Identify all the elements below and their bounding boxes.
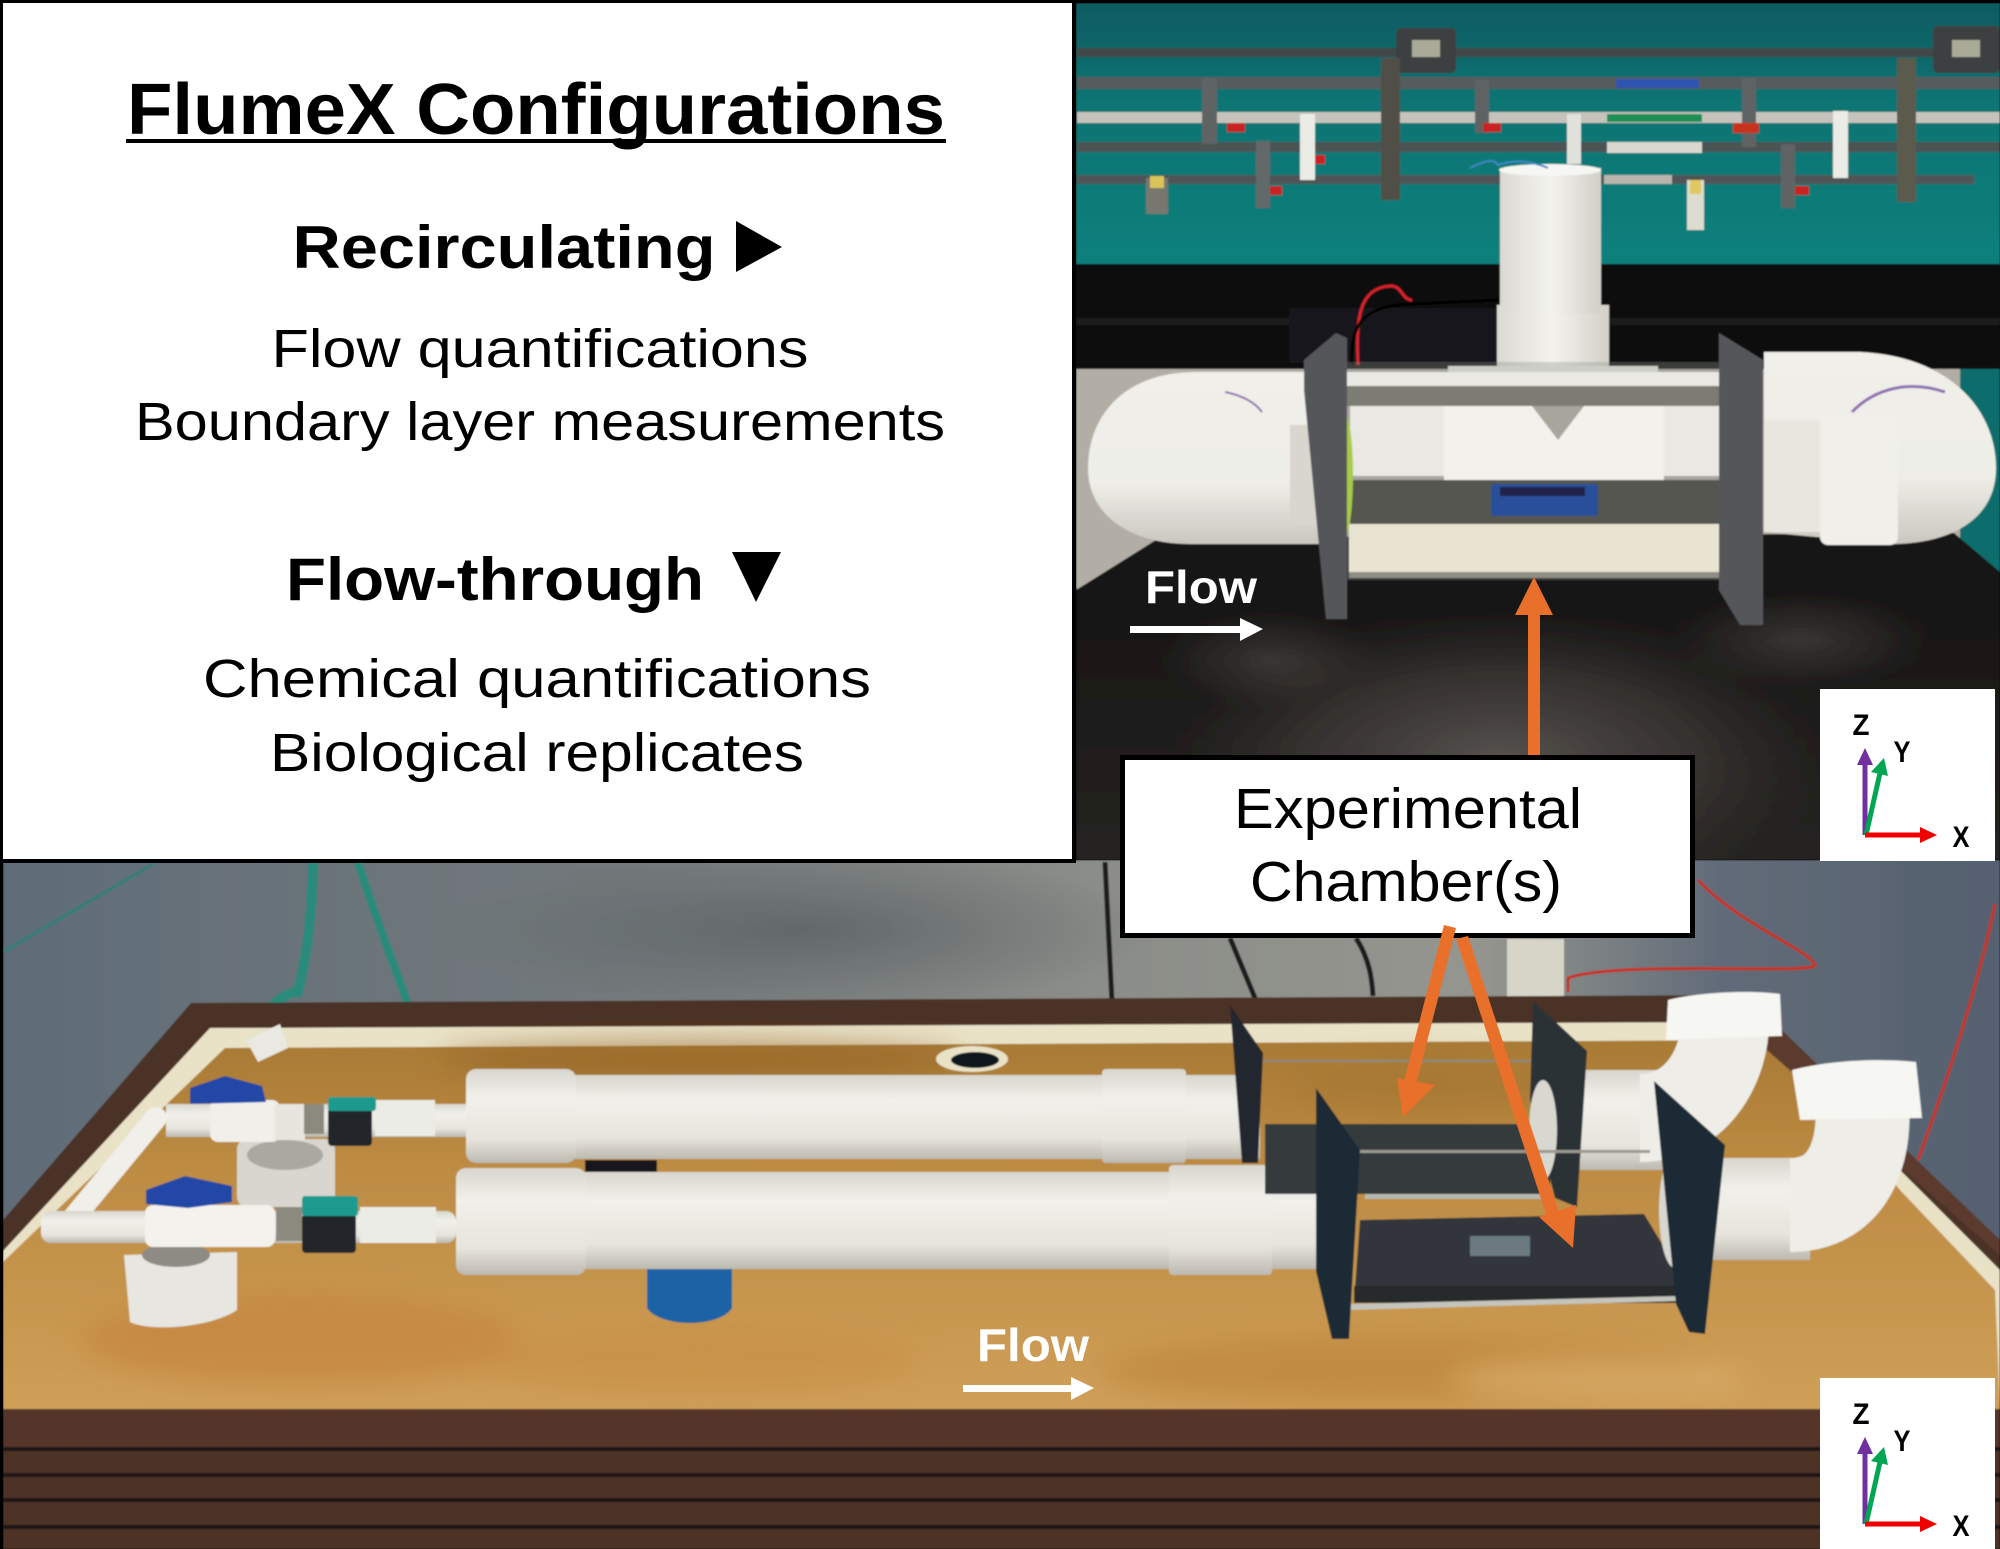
black support block xyxy=(585,1160,657,1174)
label: flow direction lower xyxy=(963,1319,1094,1400)
control box and wires xyxy=(1289,286,1500,365)
drain hole xyxy=(936,1046,1008,1072)
front long PVC pipe xyxy=(456,1165,1340,1275)
right pipe elbow xyxy=(1764,352,1996,545)
arrow: to front chamber xyxy=(1456,936,1576,1248)
axis key: upper photo: Y xyxy=(1894,736,1910,769)
blue valve handles xyxy=(146,1076,266,1208)
front deck boards xyxy=(3,1409,2000,1549)
label: flow direction lower: Flow xyxy=(977,1319,1089,1371)
rear experimental chamber xyxy=(1230,1001,1587,1207)
callout: experimental chambers: Experimental xyxy=(1234,777,1582,841)
text: recirculating uses: Flow quantifications xyxy=(272,319,808,379)
label: flow direction upper: Flow xyxy=(1145,561,1257,613)
axis key: lower photo: X xyxy=(1952,1510,1970,1543)
wooden tank rim and surface xyxy=(3,995,2000,1409)
photo: recirculating flume on lab bench xyxy=(1076,3,2000,910)
axis key: lower photo xyxy=(1820,1378,1995,1549)
panel: configurations xyxy=(0,0,1076,863)
axis key: lower photo: Z xyxy=(1852,1398,1870,1431)
bench top xyxy=(1076,533,2000,860)
text: flow-through uses: Chemical quantifications xyxy=(203,649,871,709)
label: flow direction upper xyxy=(1130,561,1263,641)
axis key: lower photo: Y xyxy=(1894,1425,1910,1458)
rear long PVC pipe xyxy=(466,1069,1260,1163)
front experimental chamber xyxy=(1316,1081,1725,1339)
digital flow meters xyxy=(276,1097,376,1253)
wall-mounted service pipes xyxy=(1077,26,2000,230)
hoses and cables behind table xyxy=(3,862,1995,1160)
heading: recirculating: Recirculating xyxy=(292,214,716,281)
teal lab wall xyxy=(1076,3,2000,264)
icon: right triangle xyxy=(736,221,782,272)
white caps under plumbing xyxy=(124,1139,335,1327)
glass experimental tank xyxy=(1325,362,1737,580)
icon: down triangle xyxy=(732,552,781,602)
blue pipe support xyxy=(647,1269,732,1323)
plumbing manifold xyxy=(41,1100,466,1247)
photo: flow-through flume on wooden table xyxy=(3,850,2000,1549)
wood stains xyxy=(80,1042,1750,1404)
axis key: upper photo: Z xyxy=(1852,709,1870,742)
arrow: to upper chamber xyxy=(1515,577,1553,760)
title: FlumeX Configurations xyxy=(127,70,945,150)
text: recirculating uses: Boundary layer measurements xyxy=(135,392,945,452)
tank end plates xyxy=(1304,333,1763,625)
black lab counter xyxy=(1076,264,2000,369)
vertical white riser xyxy=(1448,161,1658,384)
callout: experimental chambers: Chamber(s) xyxy=(1250,850,1562,914)
axis key: upper photo: X xyxy=(1952,821,1970,854)
axis key: upper photo xyxy=(1820,689,1995,861)
cabinets below counter xyxy=(1076,369,2000,589)
callout: experimental chambers xyxy=(1120,755,1695,938)
concrete floor xyxy=(3,860,2000,1260)
text: flow-through uses: Biological replicates xyxy=(270,723,804,783)
front right elbow xyxy=(1710,1060,1922,1260)
rear right elbow xyxy=(1580,992,1782,1170)
left pipe elbow xyxy=(1088,372,1320,544)
heading: flow-through: Flow-through xyxy=(286,546,704,613)
arrow: to rear chamber xyxy=(1397,925,1456,1117)
text: flow-through uses xyxy=(203,649,871,783)
small elbow fitting xyxy=(246,1024,288,1062)
text: recirculating uses xyxy=(135,319,945,452)
